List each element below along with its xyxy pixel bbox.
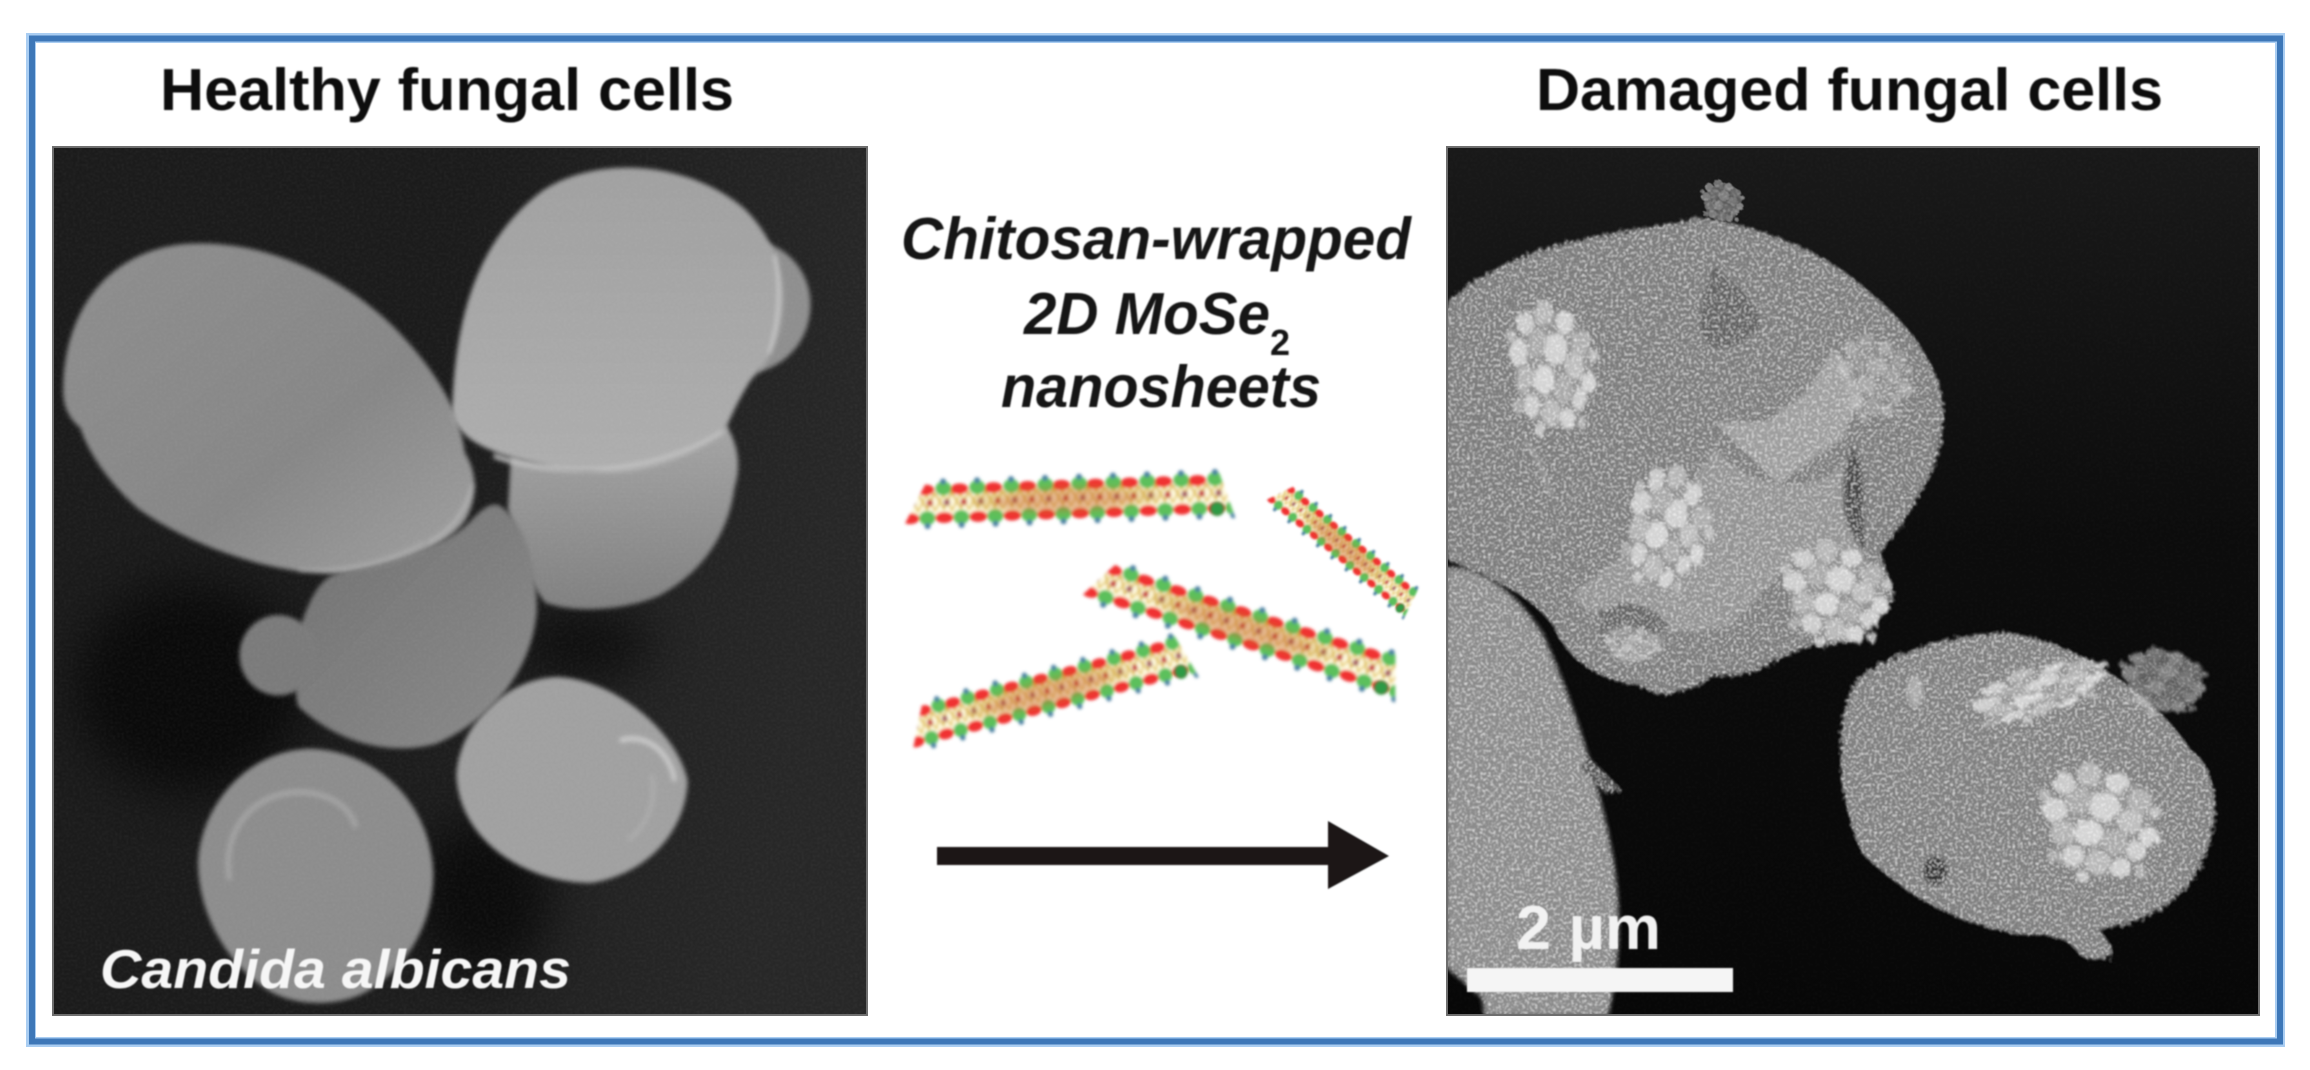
debris: top tuft [1700,179,1745,224]
nanosheet 3 [1078,552,1411,703]
nanosheet 4 [899,629,1199,754]
debris: flake band [1714,348,1863,484]
panel: center treatment label: 2D MoSe [1023,281,1270,347]
cell: big oval cell [63,243,475,574]
cell: bud on middle cell [239,615,317,695]
cell: cylinder below top cell [508,425,738,609]
debris: nanosheet clusters [1963,642,2208,883]
scale bar [1467,968,1733,992]
arrow [937,821,1389,889]
cell: left lower cell [1446,567,1619,1016]
shadow: dark areas around cells [75,583,654,979]
panel: center treatment label: 2 [1270,322,1290,363]
panel: center treatment label [901,206,1413,420]
panel: center treatment label: Chitosan-wrapped [901,206,1413,272]
label: species name: Candida albicans [100,938,571,1000]
icon: MoSe2 nanosheets [899,468,1426,754]
cell: middle cell [296,505,537,748]
cell: top cell bud [758,242,810,372]
heading: healthy fungal cells: Healthy fungal cells [160,57,734,123]
debris: nanosheet clusters [1506,299,1913,663]
cell: lower right damaged cell [1840,632,2215,960]
nanosheet 2 [1263,475,1426,620]
cell: lower right round cell [456,677,688,883]
panel: healthy cells micrograph [52,146,868,1016]
cell: lower left round cell [198,749,433,1003]
debris: small tuft on edge [1582,756,1622,793]
cell: top round cell [452,168,784,473]
cell: big damaged cell [1446,179,1944,694]
scale label: 2 µm [1516,894,1661,963]
nanosheet 1 [900,468,1236,530]
panel: center treatment label: nanosheets [1001,354,1321,420]
heading: damaged fungal cells: Damaged fungal cells [1536,57,2163,123]
panel: damaged cells micrograph [1446,146,2260,1016]
